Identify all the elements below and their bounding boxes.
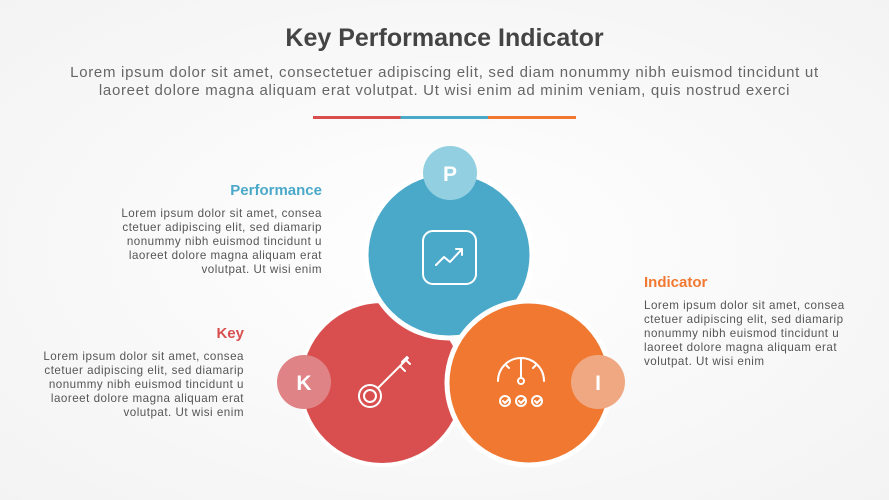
text: key: Key [216,325,244,342]
text: key: volutpat. Ut wisi enim [123,406,244,419]
circle: key [300,301,464,465]
text: performance: ctetuer adipiscing elit, sed diamarip [122,221,322,234]
text: indicator: Lorem ipsum dolor sit amet, consea [644,299,845,312]
text: performance: volutpat. Ut wisi enim [201,263,322,276]
text: performance: laoreet dolore magna aliquam erat [129,249,322,262]
badge: K [277,355,331,409]
icon: key [359,357,410,407]
subtitle: laoreet dolore magna aliquam erat volutpat. Ut wisi enim ad minim veniam, quis nostrud exerci [99,82,790,99]
text: key: Lorem ipsum dolor sit amet, consea [43,350,244,363]
badge: I: I [595,372,601,395]
text: indicator: nonummy nibh euismod tincidunt u [644,327,839,340]
text: key: ctetuer adipiscing elit, sed diamarip [44,364,244,377]
divider bar [313,116,576,119]
text: indicator: Indicator [644,274,707,291]
icon: gauge [498,358,544,406]
text: indicator: volutpat. Ut wisi enim [644,355,765,368]
text: key: nonummy nibh euismod tincidunt u [49,378,244,391]
subtitle [70,64,819,99]
subtitle: Lorem ipsum dolor sit amet, consectetuer adipiscing elit, sed diam nonummy nibh euismod tincidunt ut [70,64,819,81]
text: performance [121,182,322,276]
circle: indicator [447,301,611,465]
text: indicator: laoreet dolore magna aliquam erat [644,341,837,354]
badge: I [571,355,625,409]
text: indicator: ctetuer adipiscing elit, sed diamarip [644,313,844,326]
text: indicator [644,274,845,368]
text: key: laoreet dolore magna aliquam erat [51,392,244,405]
text: performance: Lorem ipsum dolor sit amet, consea [121,207,322,220]
text: performance: nonummy nibh euismod tincidunt u [127,235,322,248]
badge: P: P [443,163,457,186]
circle: performance [366,172,532,338]
badge: K: K [296,372,312,395]
badge: P [423,146,477,200]
text: key [43,325,244,419]
text: performance: Performance [230,182,322,199]
title: Key Performance Indicator [285,24,604,52]
icon: chart [423,231,476,284]
